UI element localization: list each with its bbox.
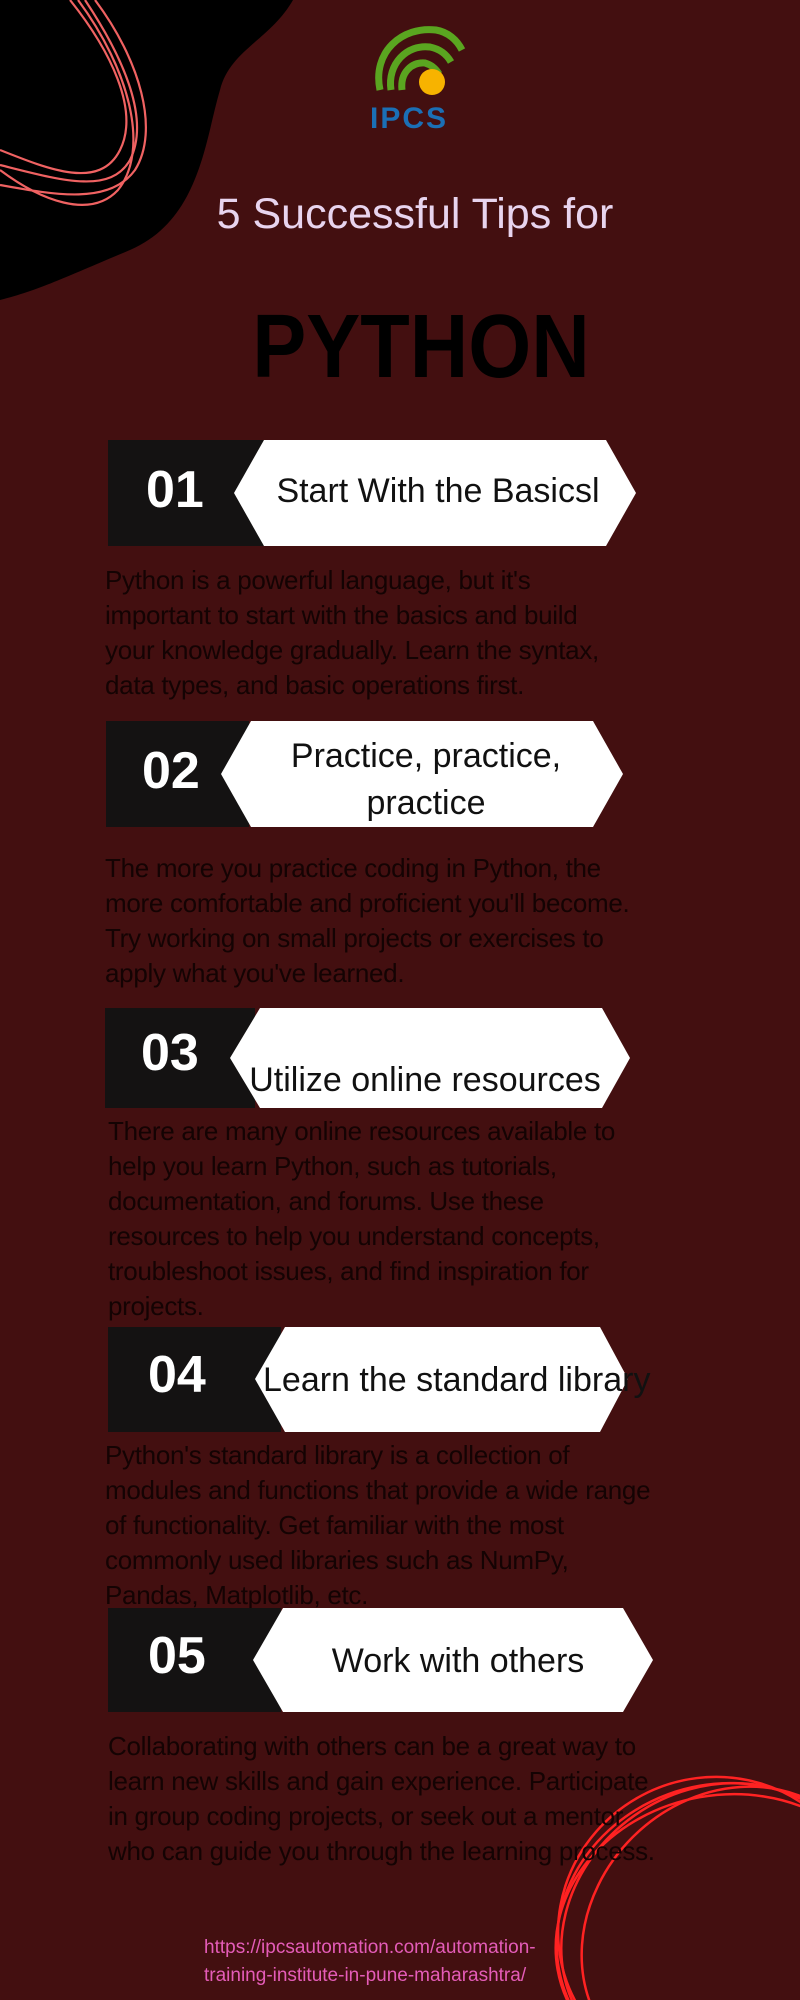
body 01: your knowledge gradually. Learn the syntax, (105, 635, 599, 665)
body 04: modules and functions that provide a wide range (105, 1475, 650, 1505)
body 03: resources to help you understand concepts, (108, 1221, 600, 1251)
body 05 (108, 1731, 655, 1866)
body 03: documentation, and forums. Use these (108, 1186, 544, 1216)
tip 03: Utilize online resources (249, 1061, 601, 1099)
body 02: apply what you've learned. (105, 958, 404, 988)
footer url: https://ipcsautomation.com/automation- (204, 1937, 536, 1958)
tip 01: Start With the Basicsl (276, 472, 600, 510)
tip 04 (108, 1327, 650, 1432)
body 02 (105, 853, 629, 988)
body 02: Try working on small projects or exercises to (105, 923, 603, 953)
body 02: The more you practice coding in Python, the (105, 853, 601, 883)
body 04: Python's standard library is a collection of (105, 1440, 569, 1470)
tip 05: 05 (148, 1627, 206, 1685)
body 03: troubleshoot issues, and find inspiration for (108, 1256, 589, 1286)
body 05: who can guide you through the learning process. (108, 1836, 655, 1866)
body 03: help you learn Python, such as tutorials, (108, 1151, 557, 1181)
body 04: Pandas, Matplotlib, etc. (105, 1580, 368, 1610)
body 03: There are many online resources available to (108, 1116, 615, 1146)
body 03 (108, 1116, 615, 1321)
tip 01: 01 (146, 461, 204, 519)
tip 05 (108, 1608, 653, 1712)
body 01: Python is a powerful language, but it's (105, 565, 530, 595)
tip 03 (105, 1008, 630, 1108)
tip 01 (108, 440, 636, 546)
body 04: of functionality. Get familiar with the most (105, 1510, 564, 1540)
tip 04: Learn the standard library (263, 1361, 650, 1399)
body 01: important to start with the basics and build (105, 600, 577, 630)
heading: PYTHON: PYTHON (252, 297, 590, 397)
title: 5 Successful Tips for: 5 Successful Tips for (217, 190, 613, 238)
tip 05: Work with others (332, 1642, 584, 1680)
body 04 (105, 1440, 650, 1610)
tip 02: Practice, practice, (291, 737, 561, 775)
body 03: projects. (108, 1291, 204, 1321)
body 05: learn new skills and gain experience. Participate (108, 1766, 648, 1796)
tip 02 (106, 721, 623, 827)
tip 02: practice (366, 784, 486, 822)
body 05: in group coding projects, or seek out a mentor (108, 1801, 623, 1831)
logo (370, 26, 466, 134)
footer url (204, 1937, 536, 1986)
tip 03: 03 (141, 1024, 199, 1082)
footer url: training-institute-in-pune-maharashtra/ (204, 1965, 526, 1986)
body 01: data types, and basic operations first. (105, 670, 524, 700)
body 02: more comfortable and proficient you'll become. (105, 888, 629, 918)
body 01 (105, 565, 599, 700)
tip 02: 02 (142, 742, 200, 800)
tip 04: 04 (148, 1346, 206, 1404)
body 04: commonly used libraries such as NumPy, (105, 1545, 569, 1575)
body 05: Collaborating with others can be a great way to (108, 1731, 636, 1761)
